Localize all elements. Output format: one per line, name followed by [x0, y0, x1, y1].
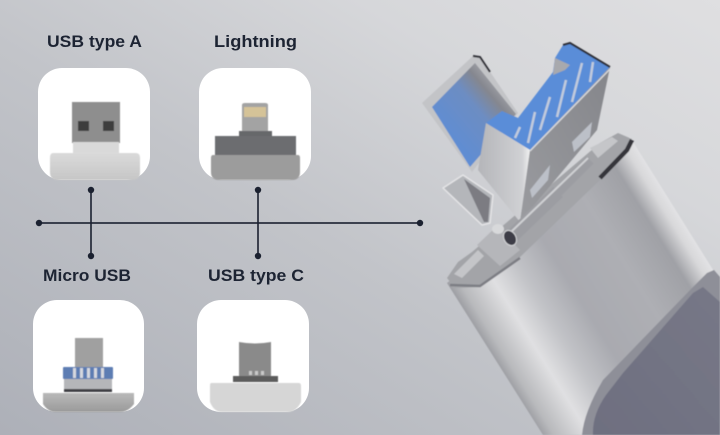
micro connector — [443, 175, 493, 225]
slot wall — [553, 58, 570, 75]
side face — [520, 67, 610, 222]
panel: Lightning connector — [199, 68, 311, 180]
panel: USB type A connector — [38, 68, 150, 180]
heading: Micro USB: Micro USB — [43, 266, 131, 285]
end cap lip — [582, 270, 720, 435]
USB A connector — [478, 43, 610, 222]
dark top rim — [563, 43, 610, 67]
illustration: flash drive — [422, 43, 720, 435]
heading: Lightning: Lightning — [214, 32, 297, 51]
connector diagram lines — [36, 187, 423, 259]
side rim highlight — [530, 69, 610, 151]
back connector — [422, 56, 518, 172]
panel: USB type C connector — [197, 300, 309, 412]
joint blob — [477, 226, 520, 266]
front face — [478, 123, 530, 222]
hinge pin — [492, 158, 590, 248]
heading: USB type C: USB type C — [208, 266, 304, 285]
blue tongue — [486, 43, 610, 150]
side windows — [530, 165, 550, 198]
panel: Micro USB connector — [33, 300, 144, 412]
end cap face — [593, 287, 720, 435]
inner rim upper right — [590, 137, 618, 158]
drive body — [447, 137, 720, 435]
heading: USB type A: USB type A — [47, 32, 142, 51]
contact stripes — [515, 62, 593, 143]
inner rim lower left — [454, 250, 484, 278]
lower rim edge — [450, 258, 520, 286]
top plate of drive — [447, 133, 632, 288]
dark rim edge — [600, 140, 632, 178]
